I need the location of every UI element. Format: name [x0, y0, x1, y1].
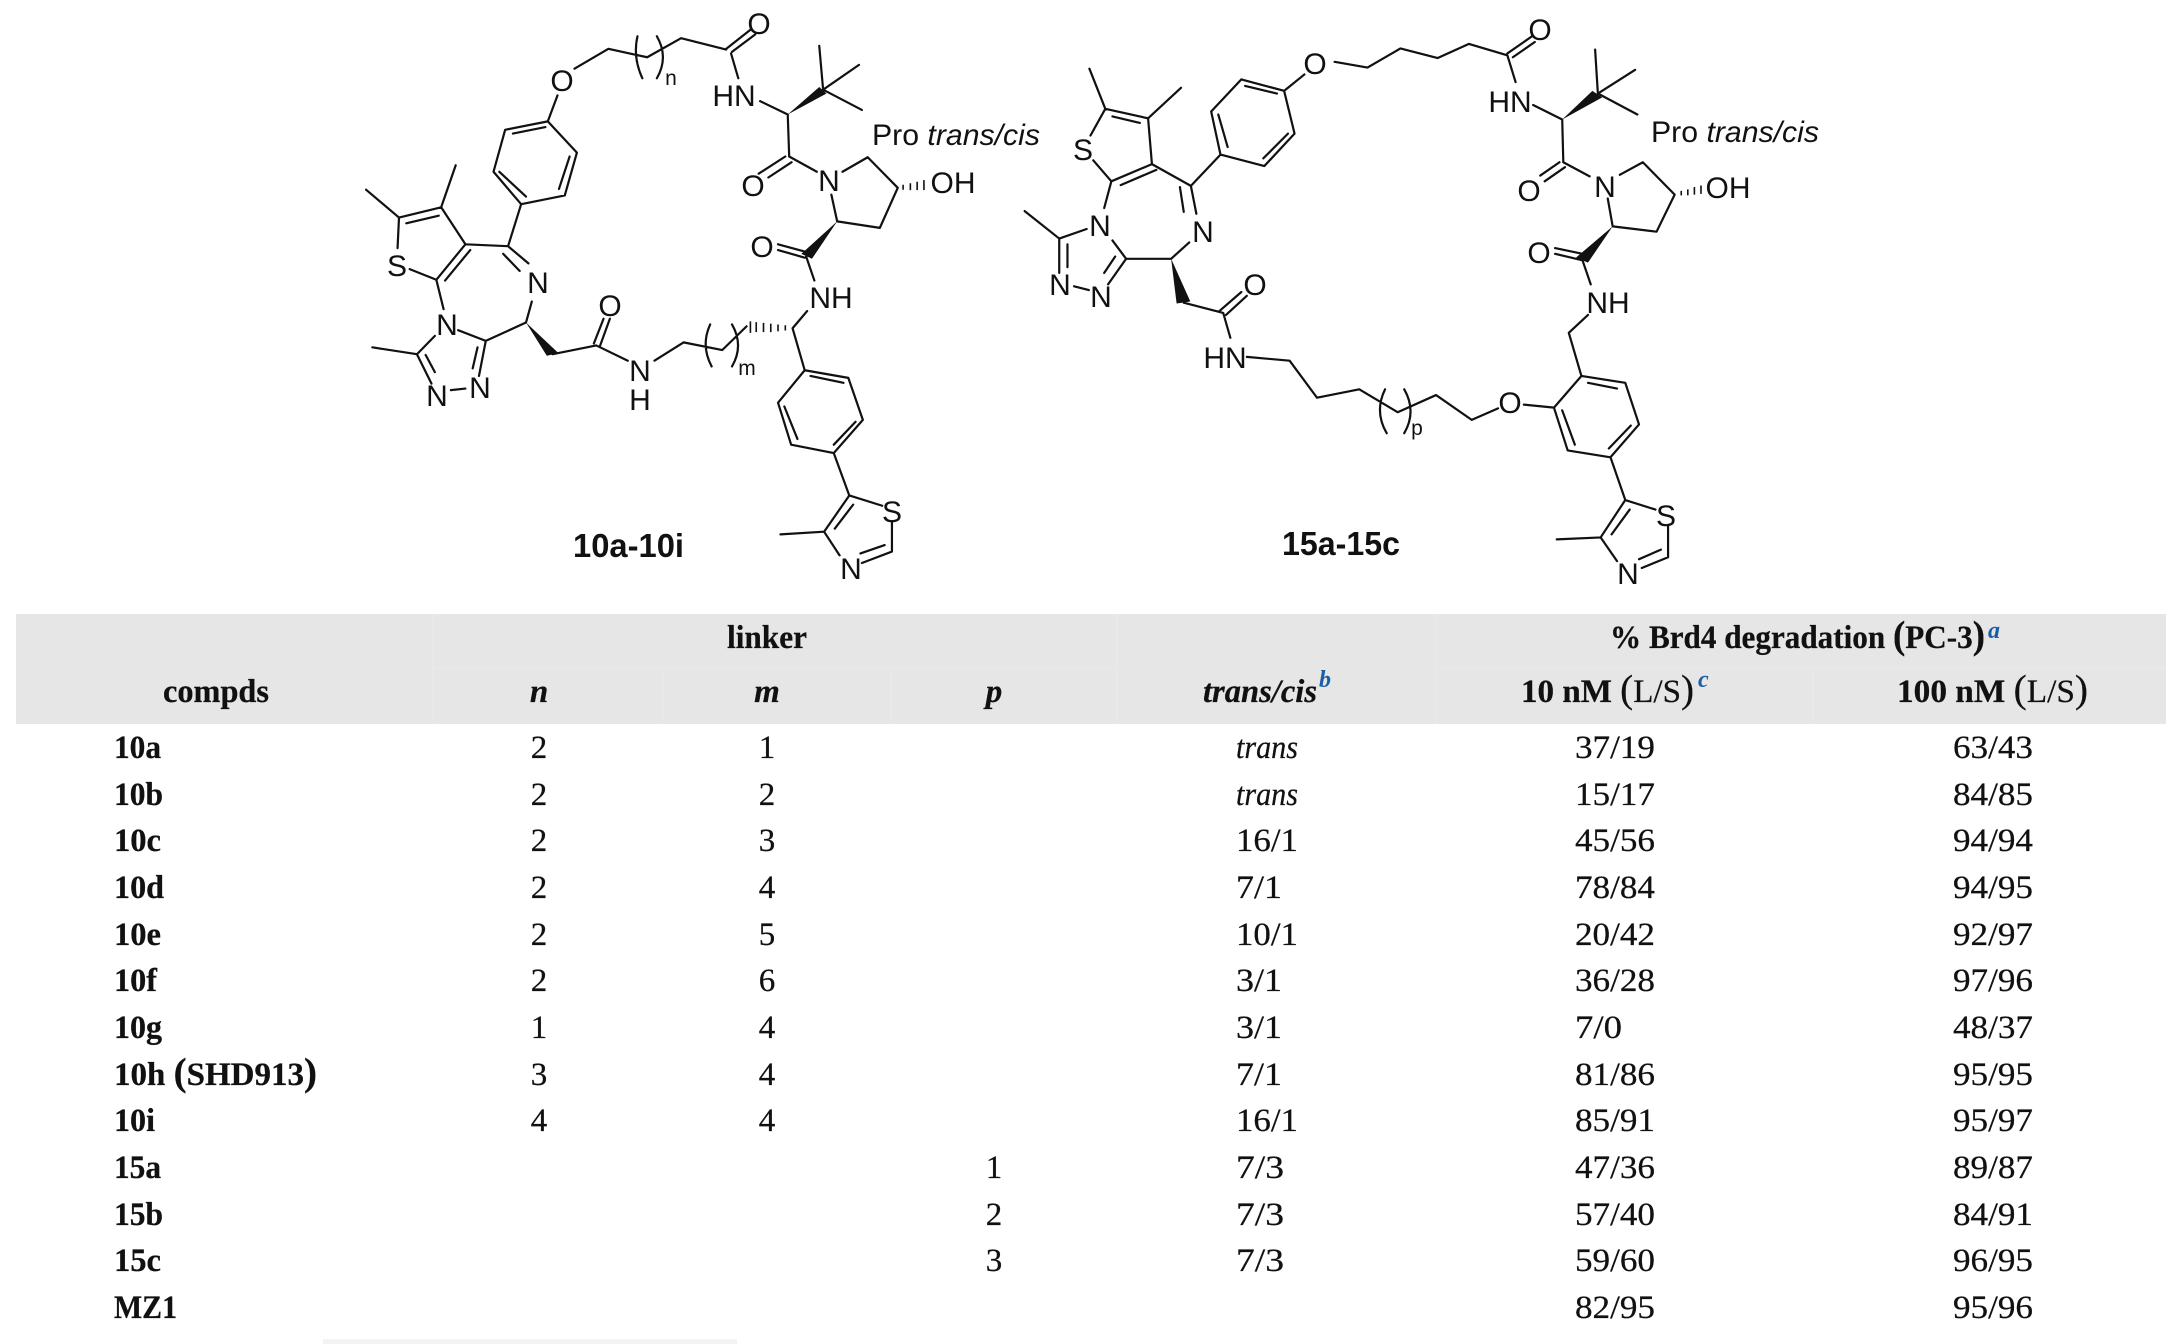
- row 10b: 2: [531, 777, 547, 813]
- row 10a: 2: [531, 730, 547, 766]
- row 10e: [114, 917, 2033, 953]
- row 15a: 47/36: [1575, 1150, 1655, 1186]
- row 10f: 3/1: [1236, 963, 1282, 999]
- row 10g: 7/0: [1575, 1010, 1622, 1046]
- row 10h (SHD913): 7/1: [1236, 1057, 1282, 1093]
- row 10i: 95/97: [1953, 1103, 2033, 1139]
- row 15c: 59/60: [1575, 1243, 1655, 1279]
- chemical structure: compounds 15a-15c: HN: [1203, 342, 1247, 375]
- row 15a: [114, 1150, 2033, 1186]
- row 10d: 78/84: [1575, 870, 1655, 906]
- row 15a: 89/87: [1953, 1150, 2033, 1186]
- row 10e: 2: [531, 917, 547, 953]
- row 10b: 10b: [114, 777, 163, 813]
- row 15b: 15b: [114, 1197, 163, 1233]
- row 15c: 15c: [114, 1243, 161, 1279]
- chemical structure: compounds 15a-15c: HN: [1488, 86, 1532, 119]
- chemical structure: compounds 15a-15c: N: [1594, 171, 1616, 204]
- row 10e: 10e: [114, 917, 161, 953]
- row 10b: 2: [759, 777, 775, 813]
- table header: m: [754, 674, 780, 710]
- row 10i: [114, 1103, 2033, 1139]
- row 10c: 2: [531, 823, 547, 859]
- chemical structure: compounds 10a-10i: H: [629, 384, 651, 417]
- row 10d: 94/95: [1953, 870, 2033, 906]
- row 10d: 7/1: [1236, 870, 1282, 906]
- chemical structure: compounds 15a-15c: O: [1303, 48, 1327, 81]
- chemical structure: compounds 15a-15c: N: [1617, 558, 1639, 591]
- row MZ1: 95/96: [1953, 1290, 2033, 1326]
- row 10i: 85/91: [1575, 1103, 1655, 1139]
- row 10a: 10a: [114, 730, 161, 766]
- compound label 15a-15c: 15a-15c: [1282, 525, 1400, 562]
- chemical structure: compounds 10a-10i: N: [527, 267, 549, 300]
- row 10d: 2: [531, 870, 547, 906]
- chemical structure: compounds 15a-15c: N: [1089, 210, 1111, 243]
- row 10h (SHD913): 81/86: [1575, 1057, 1655, 1093]
- row 10i: 4: [531, 1103, 547, 1139]
- row 10b: 15/17: [1575, 777, 1655, 813]
- chemical structure: compounds 15a-15c: S: [1656, 500, 1676, 533]
- chemical structure: compounds 15a-15c: N: [1049, 269, 1071, 302]
- label: Pro trans/cis (right structure): Pro trans/cis: [1651, 116, 1819, 149]
- row 10f: [114, 963, 2033, 999]
- chemical structure: compounds 10a-10i: n: [665, 67, 677, 90]
- row 15b: 2: [986, 1197, 1002, 1233]
- row 15b: 57/40: [1575, 1197, 1655, 1233]
- chemical structure: compounds 10a-10i: N: [818, 165, 840, 198]
- row 10e: 20/42: [1575, 917, 1655, 953]
- chemical structure: compounds 10a-10i: O: [750, 231, 774, 264]
- row 15c: 96/95: [1953, 1243, 2033, 1279]
- row 10d: 4: [759, 870, 775, 906]
- chemical structure: compounds 15a-15c: O: [1498, 387, 1522, 420]
- row 10d: 10d: [114, 870, 164, 906]
- row 10a: [114, 730, 2033, 766]
- chemical structure: compounds 10a-10i: N: [436, 309, 458, 342]
- table header: % Brd4 degradation (PC-3): [1610, 614, 1985, 657]
- row 10f: 6: [759, 963, 775, 999]
- row 10g: 48/37: [1953, 1010, 2033, 1046]
- row MZ1: [114, 1290, 2033, 1326]
- chemical structure: compounds 10a-10i: OH: [930, 167, 976, 200]
- row 10b: trans: [1236, 777, 1298, 813]
- row 10c: 10c: [114, 823, 161, 859]
- row 10h (SHD913): 10h (SHD913): [114, 1051, 317, 1094]
- chemical structure: compounds 15a-15c: O: [1517, 175, 1541, 208]
- row 10f: 10f: [114, 963, 158, 999]
- chemical structure: compounds 10a-10i: O: [747, 8, 771, 41]
- table header: a: [1988, 618, 2000, 644]
- compound label 10a-10i: 10a-10i: [573, 527, 684, 564]
- row 10a: 1: [759, 730, 775, 766]
- chemical structure: compounds 10a-10i: N: [426, 380, 448, 413]
- row 10i: 16/1: [1236, 1103, 1298, 1139]
- row 10a: trans: [1236, 730, 1298, 766]
- row 10c: 3: [759, 823, 775, 859]
- row 10c: 45/56: [1575, 823, 1655, 859]
- row 15a: 15a: [114, 1150, 161, 1186]
- row 10a: 63/43: [1953, 730, 2033, 766]
- row 10f: 2: [531, 963, 547, 999]
- row 15b: 7/3: [1236, 1197, 1284, 1233]
- row 15c: 3: [986, 1243, 1002, 1279]
- table header: linker: [727, 620, 807, 656]
- table header: [16, 614, 2166, 724]
- table header: n: [530, 674, 548, 710]
- table header: c: [1698, 667, 1709, 693]
- row 10g: 3/1: [1236, 1010, 1282, 1046]
- table header: 100 nM (L/S): [1897, 668, 2088, 711]
- row 10f: 97/96: [1953, 963, 2033, 999]
- row 10e: 5: [759, 917, 775, 953]
- chemical structure: compounds 10a-10i: S: [387, 250, 407, 283]
- row 10d: [114, 870, 2033, 906]
- chemical structure: compounds 10a-10i: O: [741, 170, 765, 203]
- label: Pro trans/cis (left structure): Pro trans/cis: [872, 119, 1040, 152]
- row 10e: 92/97: [1953, 917, 2033, 953]
- table header: p: [983, 674, 1002, 710]
- row 15a: 1: [986, 1150, 1002, 1186]
- row 10c: [114, 823, 2033, 859]
- row 10e: 10/1: [1236, 917, 1298, 953]
- chemical structure: compounds 10a-10i: m: [738, 357, 756, 380]
- row 15c: 7/3: [1236, 1243, 1284, 1279]
- row 15c: [114, 1243, 2033, 1279]
- row 10b: 84/85: [1953, 777, 2033, 813]
- chemical structure: compounds 10a-10i: N: [469, 372, 491, 405]
- row 10a: 37/19: [1575, 730, 1655, 766]
- row 15a: 7/3: [1236, 1150, 1284, 1186]
- chemical structure: compounds 15a-15c: p: [1411, 417, 1423, 440]
- chemical structure: compounds 15a-15c: OH: [1706, 172, 1750, 205]
- chemical structure: compounds 10a-10i: N: [840, 553, 862, 586]
- row 10h (SHD913): 95/95: [1953, 1057, 2033, 1093]
- chemical structure: compounds 10a-10i: S: [882, 496, 902, 529]
- row 10b: [114, 777, 2033, 813]
- chemical structure: compounds 10a-10i: NH: [809, 282, 853, 315]
- row 10i: 4: [759, 1103, 775, 1139]
- row MZ1: MZ1: [114, 1290, 177, 1326]
- table header: b: [1319, 667, 1331, 693]
- row 10h (SHD913): 4: [759, 1057, 775, 1093]
- chemical structure: compounds 10a-10i: O: [598, 290, 622, 323]
- chemical structure: compounds 15a-15c: N: [1192, 216, 1214, 249]
- chemical structure: compounds 10a-10i: O: [550, 65, 574, 98]
- chemical structure: compounds 15a-15c: [1025, 14, 1750, 591]
- chemical structure: compounds 10a-10i: HN: [712, 80, 756, 113]
- chemical structure: compounds 10a-10i: N: [629, 355, 651, 388]
- chemical structure: compounds 15a-15c: N: [1090, 281, 1112, 314]
- row 10g: 4: [759, 1010, 775, 1046]
- chemical structure: compounds 15a-15c: O: [1243, 269, 1267, 302]
- row 10h (SHD913): [114, 1051, 2033, 1094]
- table header: compds: [163, 674, 269, 710]
- row 10g: 10g: [114, 1010, 162, 1046]
- row 10c: 94/94: [1953, 823, 2033, 859]
- table header: trans/cis: [1203, 674, 1317, 710]
- row 15b: [114, 1197, 2033, 1233]
- row 10g: 1: [531, 1010, 547, 1046]
- chemical structure: compounds 15a-15c: S: [1073, 134, 1093, 167]
- chemical structure: compounds 15a-15c: O: [1528, 14, 1552, 47]
- chemical structure: compounds 15a-15c: O: [1527, 237, 1551, 270]
- row 10c: 16/1: [1236, 823, 1298, 859]
- row 10i: 10i: [114, 1103, 155, 1139]
- row 15b: 84/91: [1953, 1197, 2033, 1233]
- chemical structure: compounds 15a-15c: NH: [1586, 287, 1630, 320]
- row MZ1: 82/95: [1575, 1290, 1655, 1326]
- chemical structure: compounds 10a-10i: [366, 8, 976, 586]
- row 10g: [114, 1010, 2033, 1046]
- row 10h (SHD913): 3: [531, 1057, 547, 1093]
- row 10f: 36/28: [1575, 963, 1655, 999]
- table header: 10 nM (L/S): [1521, 668, 1694, 711]
